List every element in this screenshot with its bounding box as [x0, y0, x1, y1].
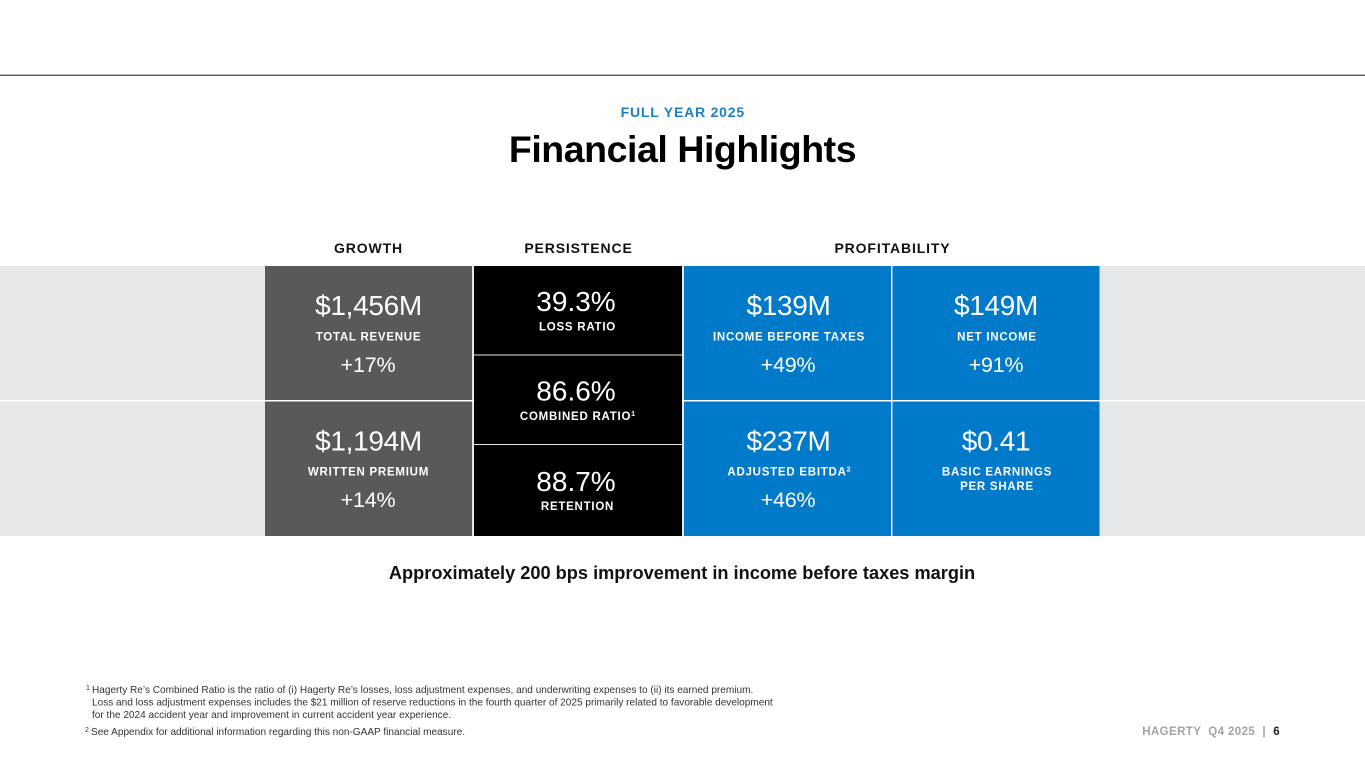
metric: combined ratio	[474, 356, 682, 444]
metric: total revenue: $1,456M	[315, 290, 422, 321]
footnotes	[85, 685, 773, 738]
metric: retention: 88.7%	[536, 466, 616, 497]
footnotes: See Appendix for additional information regarding this non-GAAP financial measure.	[91, 727, 465, 738]
metric: combined ratio: 86.6%	[536, 376, 616, 406]
footnotes: 1	[86, 685, 90, 692]
eyebrow: full year 2025: FULL YEAR 2025	[621, 104, 745, 120]
footer: page number: HAGERTY Q4 2025 | 6	[1142, 726, 1280, 738]
metric: adjusted ebitda: $237M	[746, 426, 831, 456]
title: Financial Highlights	[509, 128, 856, 170]
metric: total revenue	[265, 266, 472, 400]
metric: combined ratio: COMBINED RATIO	[520, 411, 631, 423]
metric: written premium	[265, 402, 472, 536]
metric: loss ratio: LOSS RATIO	[539, 322, 616, 334]
metric: net income: NET INCOME	[957, 332, 1037, 344]
metric: retention	[474, 445, 682, 536]
metric: written premium: WRITTEN PREMIUM	[308, 466, 429, 478]
metric: income before taxes: $139M	[746, 290, 831, 321]
metric: net income: $149M	[954, 290, 1038, 321]
callout: margin improvement: Approximately 200 bps improvement in income before taxes margin	[389, 563, 975, 583]
column heading: persistence: PERSISTENCE	[524, 240, 633, 256]
footnotes: Hagerty Re’s Combined Ratio is the ratio of (i) Hagerty Re’s losses, loss adjustment expenses, and underwriting expenses to (ii) its earned premium.	[92, 685, 753, 696]
footnotes: Loss and loss adjustment expenses includes the $21 million of reserve reductions in the fourth quarter of 2025 primarily related to favorable development	[92, 698, 773, 708]
metric: basic earnings per share	[892, 402, 1100, 536]
column heading: profitability: PROFITABILITY	[834, 240, 951, 256]
footnotes: for the 2024 accident year and improvement in current accident year experience.	[92, 710, 451, 721]
metric: income before taxes: +49%	[761, 353, 815, 377]
metric: adjusted ebitda: ADJUSTED EBITDA	[727, 466, 847, 478]
metric: loss ratio: 39.3%	[536, 286, 616, 317]
metric: basic earnings per share: $0.41	[962, 426, 1030, 456]
footnotes: 2	[85, 727, 89, 734]
panel: growth	[265, 266, 472, 536]
metric: adjusted ebitda: +46%	[761, 488, 815, 512]
metric: adjusted ebitda: 2	[847, 466, 851, 474]
metric: adjusted ebitda	[684, 402, 891, 536]
panel: persistence	[474, 266, 682, 536]
column heading: growth: GROWTH	[334, 240, 403, 256]
background band	[0, 266, 1365, 536]
metric: net income: +91%	[969, 353, 1023, 377]
metric: combined ratio: 1	[631, 411, 635, 418]
metric: net income	[892, 266, 1100, 400]
metric: written premium: +14%	[341, 488, 395, 512]
metric: retention: RETENTION	[541, 501, 614, 513]
metric: total revenue: TOTAL REVENUE	[316, 332, 421, 344]
metric: income before taxes: INCOME BEFORE TAXES	[713, 332, 865, 344]
metric: basic earnings per share: BASIC EARNINGS	[942, 466, 1052, 478]
panel: profitability	[684, 266, 1100, 536]
metric: income before taxes	[684, 266, 891, 400]
metric: loss ratio	[474, 266, 682, 354]
metric: basic earnings per share: PER SHARE	[960, 481, 1034, 493]
metric: written premium: $1,194M	[315, 426, 422, 456]
metric: total revenue: +17%	[341, 353, 395, 377]
